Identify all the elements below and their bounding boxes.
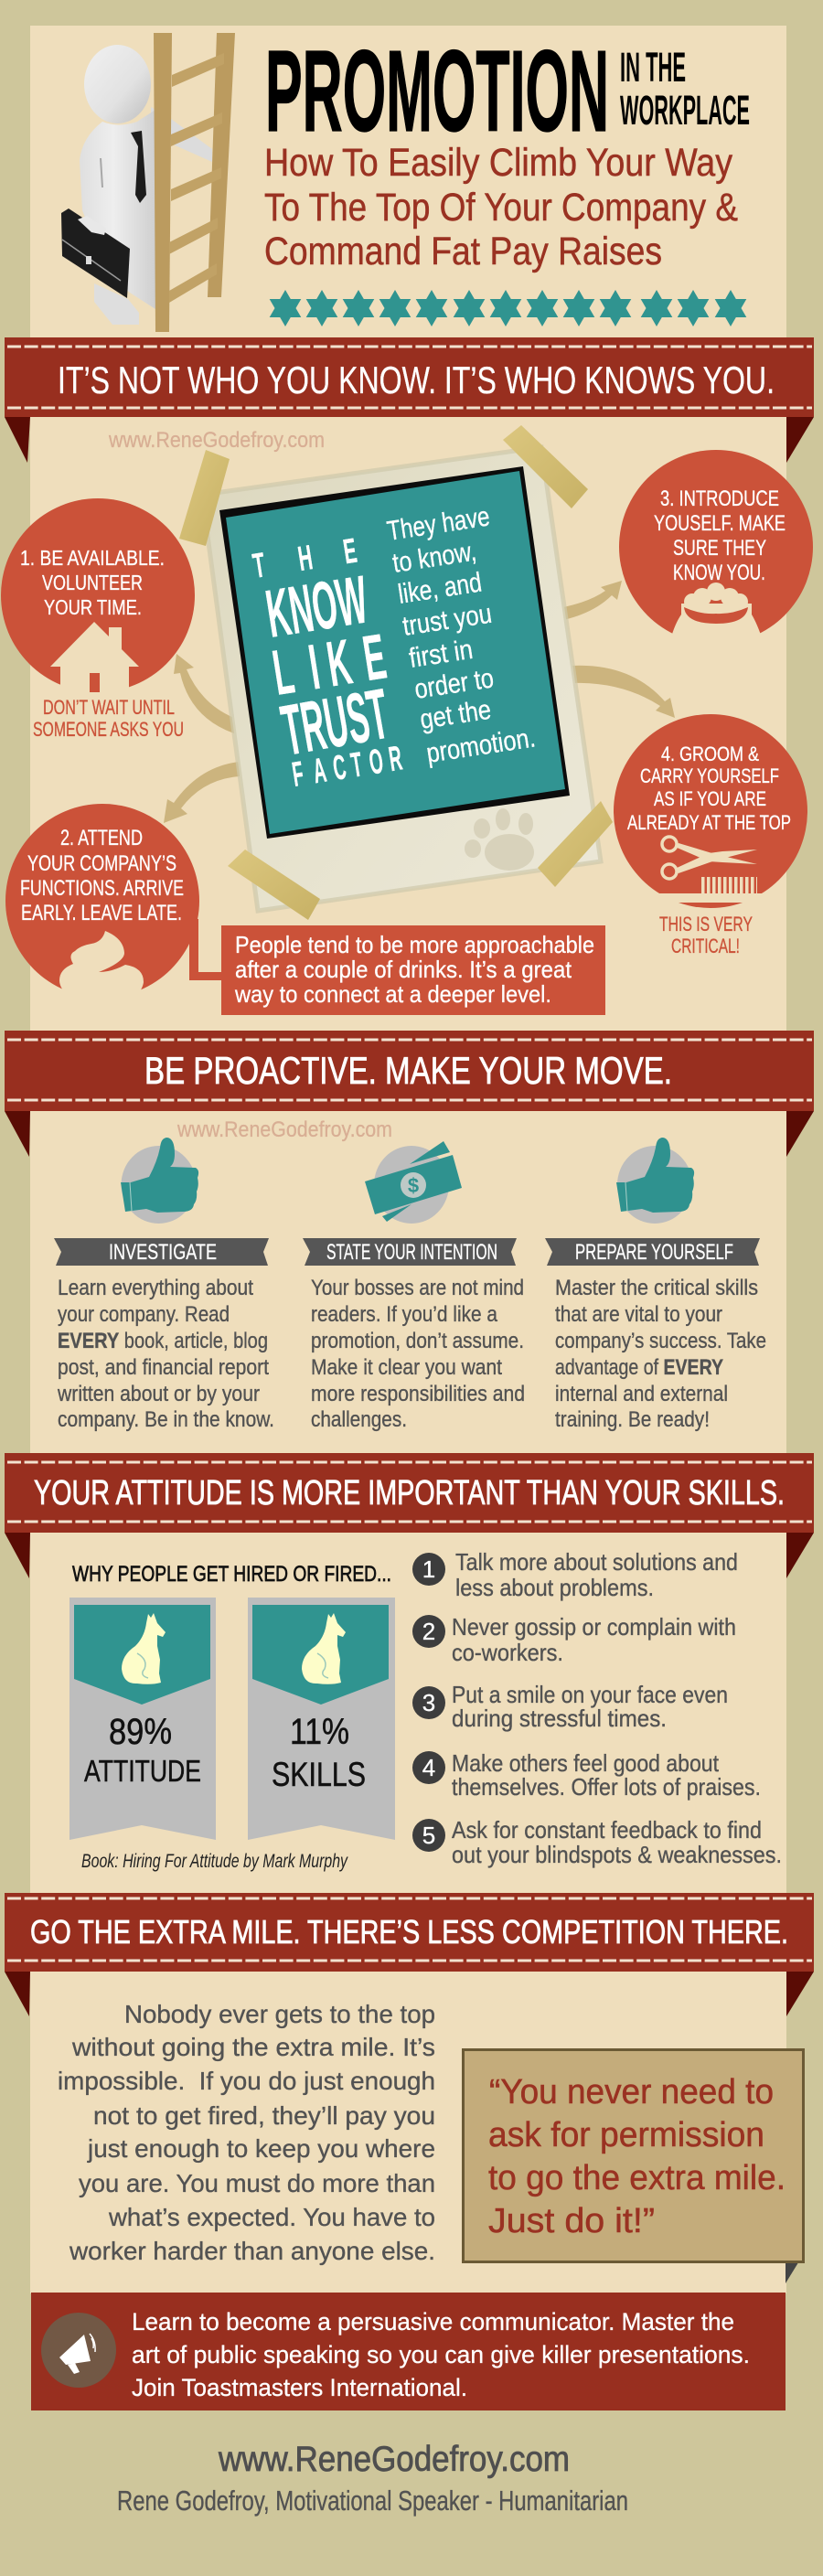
photo headline (251, 531, 405, 795)
note: this is very critical (659, 913, 753, 957)
subtitle: How To Easily Climb Your Way (264, 141, 732, 185)
ribbon: 11% skills (248, 1598, 395, 1840)
circle 3: introduce yourself (619, 450, 813, 649)
item 2: 2 (422, 1618, 435, 1645)
photo text: They have (385, 501, 492, 547)
photo text: to know, (390, 537, 478, 579)
column 2: state your intention: challenges. (311, 1407, 407, 1432)
column 1: investigate: INVESTIGATE (109, 1240, 217, 1265)
watermark: www.ReneGodefroy.com (108, 428, 325, 453)
item 3: 3 (422, 1689, 435, 1716)
circle 1: be available: VOLUNTEER (42, 571, 143, 594)
item 2: Never gossip or complain with (452, 1613, 736, 1641)
column 3: prepare yourself: training. Be ready! (555, 1407, 710, 1432)
polaroid: know like trust factor (179, 425, 613, 920)
item 5 (412, 1816, 782, 1868)
red band: toastmasters: Learn to become a persuasive communicator. Master the (132, 2308, 734, 2336)
column 1: investigate (54, 1238, 274, 1432)
item 1 (412, 1548, 738, 1601)
photo text (385, 501, 538, 769)
paragraph: extra mile: without going the extra mile. It’s (71, 2033, 435, 2061)
title: IN THE (620, 44, 686, 91)
watermark: www.ReneGodefroy.com (176, 1117, 392, 1142)
quote box (463, 2050, 803, 2283)
circle 1: be available: YOUR TIME. (44, 595, 142, 619)
column 1: investigate: written about or by your (57, 1382, 260, 1406)
photo headline: THE (251, 531, 359, 586)
paw print mark (465, 808, 534, 871)
banner 1 (5, 337, 814, 463)
photo headline: KNOW (262, 561, 372, 652)
photo text: order to (412, 663, 496, 705)
paragraph: extra mile: what’s expected. You have to (108, 2203, 435, 2231)
footer url: www.ReneGodefroy.com (218, 2440, 570, 2479)
circle 2: attend functions: EARLY. LEAVE LATE. (21, 901, 182, 925)
item 2 (412, 1613, 736, 1666)
photo headline: FACTOR (290, 740, 405, 795)
ribbon: 89% attitude: 89% (109, 1712, 172, 1752)
photo text: get the (418, 695, 493, 735)
icon: megaphone (41, 2313, 116, 2388)
icon: scissors and comb (662, 837, 757, 885)
circle 2: attend functions (5, 804, 199, 999)
paragraph: extra mile: just enough to keep you where (87, 2134, 435, 2163)
circle 1: be available (1, 498, 195, 704)
paragraph: extra mile: Nobody ever gets to the top (124, 2000, 435, 2028)
note: don't wait: DON’T WAIT UNTIL (43, 696, 175, 719)
column 2: state your intention: promotion, don’t assume. (311, 1329, 524, 1353)
quote box: “You never need to (489, 2073, 774, 2111)
note: this is very critical: THIS IS VERY (659, 913, 753, 935)
icon: thumbs up 2 (616, 1138, 694, 1224)
banner 4 (5, 1893, 814, 2016)
book credit: Book: Hiring For Attitude by Mark Murphy (81, 1851, 348, 1872)
column 2: state your intention: more responsibilities and (311, 1382, 525, 1406)
ribbon: 89% attitude: ATTITUDE (84, 1754, 201, 1788)
red band: toastmasters: Join Toastmasters International. (132, 2374, 467, 2401)
circle 4: groom and carry yourself: AS IF YOU ARE (654, 787, 766, 810)
column 1: investigate: Learn everything about (58, 1276, 253, 1300)
column 1: investigate: EVERY book, article, blog (58, 1329, 268, 1353)
photo headline: LIKE (268, 620, 390, 709)
circle 4: groom and carry yourself (614, 714, 807, 908)
item 4 (412, 1749, 761, 1801)
row of teal stars (270, 290, 746, 326)
circle 2: attend functions: 2. ATTEND (60, 826, 143, 850)
column 2: state your intention: Your bosses are not mind (311, 1276, 524, 1300)
subtitle: To The Top Of Your Company & (264, 186, 738, 230)
photo text: promotion. (424, 722, 538, 769)
circle 4: groom and carry yourself: 4. GROOM & (661, 743, 759, 765)
photo text: trust you (401, 599, 494, 642)
photo text: like, and (396, 568, 484, 610)
circle 2: attend functions: YOUR COMPANY’S (27, 851, 176, 876)
footer credit: Rene Godefroy, Motivational Speaker - Humanitarian (117, 2485, 628, 2517)
column 3: prepare yourself: company’s success. Take (555, 1329, 766, 1353)
ribbon: 89% attitude (69, 1598, 216, 1840)
quote box: to go the extra mile. (488, 2159, 786, 2197)
callout: drinks: People tend to be more approachable (235, 931, 594, 958)
illustration: white figure climbing a ladder with briefcase (61, 33, 235, 332)
circle 3: introduce yourself: 3. INTRODUCE (660, 486, 779, 511)
column 3: prepare yourself: PREPARE YOURSELF (575, 1240, 733, 1265)
item 3: Put a smile on your face even (452, 1681, 728, 1708)
banner 3 (5, 1453, 814, 1578)
note: don't wait: SOMEONE ASKS YOU (33, 718, 184, 741)
photo text: first in (407, 635, 475, 674)
item 5: Ask for constant feedback to find (452, 1816, 762, 1844)
heading: why people get hired or fired: WHY PEOPLE GET HIRED OR FIRED... (72, 1562, 391, 1587)
column 3: prepare yourself: internal and external (555, 1382, 728, 1406)
item 3: during stressful times. (452, 1705, 667, 1732)
icon: thumbs up 1 (121, 1138, 198, 1224)
red band: toastmasters: art of public speaking so you can give killer presentations. (132, 2341, 750, 2368)
subtitle: Command Fat Pay Raises (264, 230, 662, 273)
column 3: prepare yourself (545, 1238, 766, 1432)
column 2: state your intention (303, 1238, 525, 1432)
column 1: investigate: company. Be in the know. (58, 1407, 274, 1432)
item 3 (412, 1681, 728, 1732)
circle 1: be available: 1. BE AVAILABLE. (20, 546, 165, 570)
note: this is very critical: CRITICAL! (671, 935, 740, 957)
numbered list (412, 1548, 782, 1868)
ribbon: 11% skills: 11% (290, 1712, 349, 1752)
note: don't wait (33, 696, 184, 741)
item 5: out your blindspots & weaknesses. (452, 1841, 782, 1868)
item 1: Talk more about solutions and (455, 1548, 738, 1576)
column 1: investigate: post, and financial report (58, 1355, 269, 1380)
banner 2: BE PROACTIVE. MAKE YOUR MOVE. (144, 1049, 672, 1092)
callout: drinks: way to connect at a deeper level. (234, 980, 551, 1008)
callout: drinks (189, 919, 605, 1015)
item 5: 5 (422, 1822, 435, 1849)
item 4: 4 (422, 1754, 435, 1781)
column 2: state your intention: Make it clear you want (311, 1355, 502, 1380)
circle 3: introduce yourself: KNOW YOU. (673, 561, 765, 585)
ribbon: 11% skills: SKILLS (272, 1756, 366, 1793)
item 4: themselves. Offer lots of praises. (452, 1773, 761, 1801)
item 1: less about problems. (455, 1574, 654, 1601)
column 3: prepare yourself: that are vital to your (555, 1302, 722, 1327)
callout: drinks: after a couple of drinks. It’s a great (235, 956, 572, 983)
column 3: prepare yourself: Master the critical skills (555, 1276, 758, 1300)
column 2: state your intention: readers. If you’d like a (311, 1302, 498, 1327)
column 2: state your intention: STATE YOUR INTENTION (326, 1240, 497, 1265)
paragraph: extra mile (58, 2000, 435, 2265)
photo headline: TRUST (276, 673, 394, 771)
item 1: 1 (422, 1555, 435, 1583)
item 2: co-workers. (452, 1639, 563, 1666)
paragraph: extra mile: not to get fired, they’ll pay you (93, 2101, 435, 2130)
paragraph: extra mile: impossible. If you do just enough (58, 2067, 435, 2095)
icon: money (365, 1141, 462, 1224)
column 1: investigate: your company. Read (58, 1302, 230, 1327)
item 4: Make others feel good about (452, 1749, 720, 1777)
column 3: prepare yourself: advantage of EVERY (555, 1355, 723, 1380)
circle 2: attend functions: FUNCTIONS. ARRIVE (20, 876, 184, 901)
paragraph: extra mile: worker harder than anyone else. (69, 2237, 435, 2265)
banner 2 (5, 1031, 814, 1157)
circle 3: introduce yourself: SURE THEY (673, 536, 766, 561)
arrows from polaroid to circles (164, 581, 675, 823)
quote box: ask for permission (488, 2116, 764, 2154)
red band: toastmasters (31, 2293, 786, 2410)
tape strips (179, 425, 613, 920)
circle 4: groom and carry yourself: CARRY YOURSELF (640, 764, 779, 787)
paragraph: extra mile: you are. You must do more than (79, 2169, 435, 2197)
icon: money: $ (408, 1174, 419, 1197)
subtitle (264, 141, 738, 273)
quote box: Just do it!” (488, 2202, 655, 2240)
